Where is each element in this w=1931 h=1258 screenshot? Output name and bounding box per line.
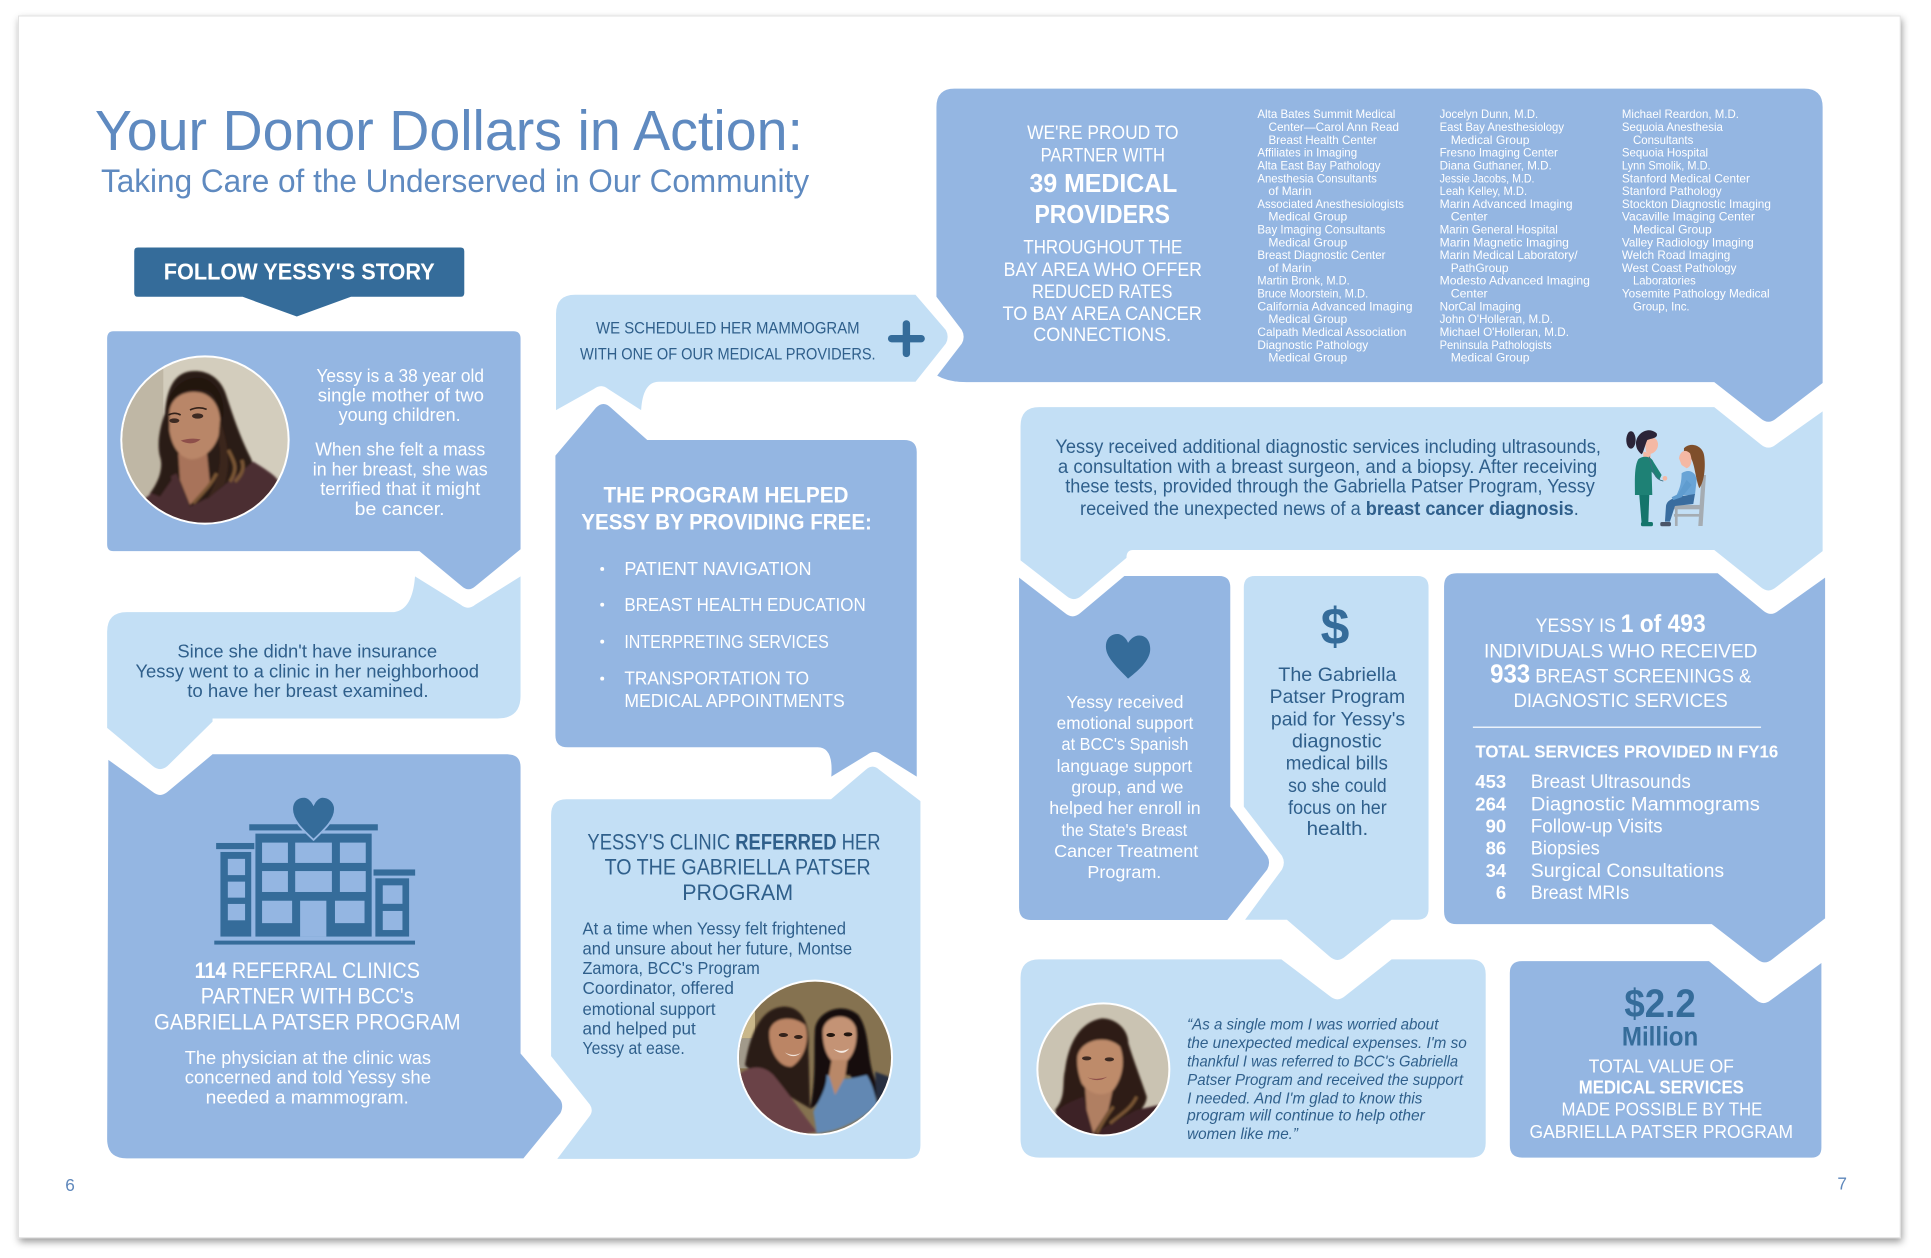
text: no insurance: Since she didn't have insurance <box>177 641 437 662</box>
text: emotional support: Zamora, BCC's Program <box>583 958 760 978</box>
table: service counts: Diagnostic Mammograms <box>1531 793 1760 815</box>
heading: program helped <box>581 482 872 535</box>
list: providers column 2: Marin Advanced Imaging <box>1440 197 1573 211</box>
panel: clinic referred <box>551 767 920 1159</box>
text: intro: young children. <box>339 404 461 425</box>
text: bills: diagnostic <box>1292 732 1382 753</box>
list: providers column 1: Affiliates in Imaging <box>1257 146 1357 160</box>
text: quote <box>1186 1017 1467 1143</box>
text: intro: When she felt a mass <box>315 439 485 460</box>
text: 1 of 493: 933 BREAST SCREENINGS & <box>1490 660 1751 688</box>
text: support group: at BCC's Spanish <box>1062 734 1188 754</box>
panel: medical providers <box>936 89 1823 422</box>
text: referral clinics: PARTNER WITH BCC's <box>201 984 414 1009</box>
text: bills: so she could <box>1288 776 1387 797</box>
page number 6: 6 <box>65 1175 75 1195</box>
text: emotional support: At a time when Yessy felt frightened <box>583 919 846 939</box>
table: service counts <box>1475 771 1760 904</box>
icon: heart <box>1106 634 1150 679</box>
subtitle: Taking Care of the Underserved in Our Community <box>101 163 809 199</box>
text: diagnosis: received the unexpected news of a breast cancer diagnosis. <box>1080 499 1579 520</box>
list: providers column 1: Alta Bates Summit Medical <box>1257 107 1395 121</box>
list: providers column 3: Stanford Medical Center <box>1622 171 1750 185</box>
table: service counts: Biopsies <box>1531 838 1600 860</box>
text: support group: Cancer Treatment <box>1054 841 1198 861</box>
list: free services: BREAST HEALTH EDUCATION <box>624 594 866 615</box>
photo: Yessy with Montse <box>737 980 895 1142</box>
icon: doctor and patient <box>1626 430 1706 526</box>
list: providers column 3: Vacaville Imaging Center <box>1622 210 1755 224</box>
banner: follow Yessy's story: FOLLOW YESSY'S STORY <box>164 259 435 285</box>
text: emotional support: Yessy at ease. <box>583 1038 685 1058</box>
text: referral clinics: GABRIELLA PATSER PROGRAM <box>154 1010 461 1035</box>
list: providers column 1: Calpath Medical Association <box>1257 325 1406 339</box>
list: providers column 1: Anesthesia Consultants <box>1257 171 1377 185</box>
text: emotional support: and unsure about her future, Montse <box>583 938 852 958</box>
list: providers column 2: Center <box>1451 287 1488 301</box>
text: bills: health. <box>1307 819 1368 840</box>
text: no insurance: to have her breast examined. <box>187 680 429 701</box>
list: free services: INTERPRETING SERVICES <box>624 631 829 652</box>
list: providers column 3: Medical Group <box>1633 223 1712 237</box>
list: free services: MEDICAL APPOINTMENTS <box>624 690 845 711</box>
panel: scheduled mammogram: WE SCHEDULED HER MAMMOGRAM <box>596 319 860 338</box>
table: service counts: 264 <box>1475 793 1507 814</box>
text: intro: be cancer. <box>355 498 445 519</box>
panel: emotional support <box>1019 576 1269 920</box>
list: providers column 2: Jocelyn Dunn, M.D. <box>1440 107 1538 121</box>
panel: referral clinics <box>107 754 562 1158</box>
text: emotional support: and helped put <box>583 1018 696 1038</box>
list: providers column 1: of Marin <box>1268 261 1312 275</box>
list: providers column 2: East Bay Anesthesiology <box>1440 120 1564 134</box>
list: providers column 1: Medical Group <box>1268 235 1348 249</box>
icon: plus <box>892 324 921 353</box>
heading: referred <box>587 830 881 905</box>
text: intro: terrified that it might <box>320 478 480 499</box>
list: providers column 1: Diagnostic Pathology <box>1257 338 1368 352</box>
text: quote: thankful I was referred to BCC's Gabriella <box>1187 1053 1458 1070</box>
list: providers column 2: NorCal Imaging <box>1440 299 1521 313</box>
text: total value: MEDICAL SERVICES <box>1579 1077 1744 1098</box>
text: bills: paid for Yessy's <box>1271 709 1405 730</box>
panel: additional diagnostics <box>1021 407 1823 599</box>
list: providers column 2: Diana Guthaner, M.D. <box>1440 158 1552 172</box>
table: service counts: Follow-up Visits <box>1531 816 1663 838</box>
list: free services: PATIENT NAVIGATION <box>624 558 812 579</box>
heading: program helped: THE PROGRAM HELPED <box>603 482 849 507</box>
table: service counts: 34 <box>1486 860 1507 881</box>
text: intro: in her breast, she was <box>313 458 488 479</box>
text: 1 of 493: YESSY IS 1 of 493 <box>1536 611 1706 638</box>
list: providers column 3: Welch Road Imaging <box>1622 248 1730 262</box>
text: bills: The Gabriella <box>1278 665 1397 686</box>
photo: Yessy smiling <box>1036 1002 1170 1138</box>
list: providers column 2: Marin General Hospital <box>1440 223 1558 237</box>
text: partner statement: CONNECTIONS. <box>1033 325 1171 346</box>
panel: quote <box>1021 959 1486 1158</box>
panel: medical bills paid <box>1244 576 1429 960</box>
text: emotional support <box>583 919 852 1058</box>
text: bills: Patser Program <box>1270 687 1405 708</box>
heading: referred: YESSY'S CLINIC REFERRED HER <box>587 830 881 855</box>
text: total value: MADE POSSIBLE BY THE <box>1562 1099 1762 1120</box>
text: support group: group, and we <box>1071 777 1184 797</box>
text: quote: the unexpected medical expenses. I'm so <box>1187 1035 1467 1052</box>
list: providers column 1: of Marin <box>1268 184 1312 198</box>
list: providers column 1 <box>1257 107 1413 365</box>
text: diagnosis: a consultation with a breast surgeon, and a biopsy. After receiving <box>1058 457 1597 478</box>
text: quote: program will continue to help other <box>1186 1108 1426 1125</box>
text: referral clinics: The physician at the clinic was <box>185 1047 431 1068</box>
icon: dollar sign: $ <box>1321 597 1350 655</box>
table: service counts: 6 <box>1496 882 1506 903</box>
list: providers column 1: Center—Carol Ann Read <box>1268 120 1399 134</box>
banner: follow Yessy's story <box>134 248 464 317</box>
panel: Yessy intro <box>107 331 521 589</box>
list: providers column 1: Martin Bronk, M.D. <box>1257 274 1350 288</box>
text: total value <box>1530 1056 1793 1142</box>
panel: clinic visit <box>107 576 521 769</box>
text: partner statement: WE'RE PROUD TO <box>1027 123 1179 144</box>
list: providers column 3: Group, Inc. <box>1633 299 1690 313</box>
text: support group: Program. <box>1087 862 1161 882</box>
list: providers column 3: Valley Radiology Imaging <box>1622 235 1754 249</box>
list: providers column 3: Yosemite Pathology Medical <box>1622 287 1770 301</box>
text: partner statement <box>1002 123 1202 346</box>
text: no insurance <box>135 641 479 701</box>
list: providers column 1: Medical Group <box>1268 312 1348 326</box>
list: providers column 1: Medical Group <box>1268 210 1348 224</box>
text: support group: Yessy received <box>1066 692 1183 712</box>
text: partner statement: BAY AREA WHO OFFER <box>1004 260 1202 281</box>
list: providers column 2: Leah Kelley, M.D. <box>1440 184 1527 198</box>
text: diagnosis: Yessy received additional diagnostic services including ultrasounds, <box>1055 437 1601 458</box>
text: partner statement: 39 MEDICAL <box>1030 170 1177 198</box>
list: providers column 1: Bay Imaging Consultants <box>1257 223 1386 237</box>
text: 1 of 493: INDIVIDUALS WHO RECEIVED <box>1484 641 1757 663</box>
table: service counts: 90 <box>1486 816 1506 837</box>
stat: $2.2 Million: $2.2 <box>1624 982 1696 1026</box>
text: quote: Patser Program and received the support <box>1187 1072 1464 1089</box>
text: diagnosis: these tests, provided through the Gabriella Patser Program, Yessy <box>1065 477 1595 498</box>
list: providers column 2: Peninsula Pathologists <box>1440 338 1552 352</box>
list: providers column 3: Stanford Pathology <box>1622 184 1722 198</box>
text: diagnosis <box>1055 437 1601 520</box>
list: providers column 2: Marin Medical Laboratory/ <box>1440 248 1578 262</box>
list: providers column 2: Medical Group <box>1451 351 1530 365</box>
list: providers column 3: Laboratories <box>1633 274 1696 288</box>
list: providers column 2: Michael O'Holleran, M.D. <box>1440 325 1569 339</box>
list: providers column 2: Fresno Imaging Center <box>1440 146 1558 160</box>
list: providers column 3: Sequoia Anesthesia <box>1622 120 1723 134</box>
list: providers column 1: Associated Anesthesiologists <box>1257 197 1404 211</box>
list: providers column 2: Center <box>1451 210 1488 224</box>
table: service counts: Breast Ultrasounds <box>1531 771 1691 793</box>
list: providers column 1: Alta East Bay Pathology <box>1257 158 1381 172</box>
text: bills: medical bills <box>1286 754 1388 775</box>
text: support group: the State's Breast <box>1062 820 1187 840</box>
panel: program helped <box>555 404 917 777</box>
text: partner statement: TO BAY AREA CANCER <box>1002 304 1202 325</box>
list: free services: TRANSPORTATION TO <box>624 668 809 689</box>
stat: $2.2 Million: Million <box>1622 1021 1698 1052</box>
text: quote: I needed. And I'm glad to know this <box>1187 1090 1422 1107</box>
text: referral clinics <box>154 958 461 1107</box>
page number 7: 7 <box>1837 1174 1847 1194</box>
text: intro: single mother of two <box>318 384 484 405</box>
text: support group: emotional support <box>1057 713 1193 733</box>
list: providers column 2: Modesto Advanced Imaging <box>1440 274 1590 288</box>
list: providers column 2: Jessie Jacobs, M.D. <box>1440 171 1534 185</box>
text: partner statement: PARTNER WITH <box>1041 145 1165 166</box>
list: providers column 2: Medical Group <box>1451 133 1530 147</box>
text: intro: Yessy is a 38 year old <box>316 365 484 386</box>
list: providers column 3: Consultants <box>1633 133 1693 147</box>
text: quote: women like me.” <box>1187 1126 1299 1143</box>
stat: $2.2 Million <box>1622 982 1698 1052</box>
list: providers column 1: Medical Group <box>1268 351 1348 365</box>
text: total value: GABRIELLA PATSER PROGRAM <box>1530 1121 1793 1142</box>
text: referral clinics: 114 REFERRAL CLINICS <box>195 958 420 983</box>
list: providers column 2 <box>1440 107 1590 365</box>
list: providers column 3: Stockton Diagnostic Imaging <box>1622 197 1771 211</box>
heading: referred: TO THE GABRIELLA PATSER <box>605 854 871 879</box>
text: 1 of 493: DIAGNOSTIC SERVICES <box>1514 690 1728 712</box>
table: service counts: 453 <box>1475 771 1506 792</box>
text: support group: language support <box>1057 756 1192 776</box>
text: referral clinics: concerned and told Yessy she <box>185 1067 431 1088</box>
panel: 2.2 million <box>1510 961 1821 1158</box>
list: providers column 3 <box>1622 107 1771 313</box>
list: providers column 2: John O'Holleran, M.D. <box>1440 312 1553 326</box>
text: total value: TOTAL VALUE OF <box>1589 1056 1734 1077</box>
list: providers column 1: California Advanced Imaging <box>1257 299 1413 313</box>
table: service counts: 86 <box>1486 838 1506 859</box>
list: free services <box>600 558 866 711</box>
list: providers column 1: Breast Diagnostic Center <box>1257 248 1386 262</box>
title: Your Donor Dollars in Action: <box>95 100 803 163</box>
list: providers column 2: PathGroup <box>1451 261 1509 275</box>
list: providers column 3: Michael Reardon, M.D. <box>1622 107 1739 121</box>
text: partner statement: REDUCED RATES <box>1032 282 1172 303</box>
text: bills <box>1270 665 1405 840</box>
list: providers column 1: Bruce Moorstein, M.D. <box>1257 287 1368 301</box>
list: providers column 2: Marin Magnetic Imaging <box>1440 235 1569 249</box>
heading: program helped: YESSY BY PROVIDING FREE: <box>581 510 872 535</box>
table: service counts: Breast MRIs <box>1531 882 1629 904</box>
panel: scheduled mammogram: WITH ONE OF OUR MEDICAL PROVIDERS. <box>580 345 876 364</box>
text: no insurance: Yessy went to a clinic in her neighborhood <box>135 660 479 681</box>
list: providers column 3: Lynn Smolik, M.D. <box>1622 158 1711 172</box>
list: providers column 1: Breast Health Center <box>1268 133 1377 147</box>
text: emotional support: Coordinator, offered <box>583 978 734 998</box>
text: partner statement: PROVIDERS <box>1034 201 1170 229</box>
heading: total services: TOTAL SERVICES PROVIDED IN FY16 <box>1475 741 1778 761</box>
text: support group: helped her enroll in <box>1049 798 1201 818</box>
text: intro <box>313 365 488 519</box>
heading: referred: PROGRAM <box>682 880 793 905</box>
icon: hospital building with heart <box>214 797 415 945</box>
list: providers column 3: Sequoia Hospital <box>1622 146 1708 160</box>
list: providers column 3: West Coast Pathology <box>1622 261 1737 275</box>
text: support group <box>1049 692 1201 882</box>
text: quote: “As a single mom I was worried about <box>1187 1017 1439 1034</box>
text: bills: focus on her <box>1288 798 1387 819</box>
table: service counts: Surgical Consultations <box>1531 860 1724 882</box>
text: referral clinics: needed a mammogram. <box>206 1086 409 1107</box>
text: 1 of 493 <box>1484 611 1757 712</box>
panel: total services <box>1444 573 1825 962</box>
photo: Yessy portrait <box>120 355 290 537</box>
text: partner statement: THROUGHOUT THE <box>1023 238 1182 259</box>
text: emotional support: emotional support <box>583 999 716 1019</box>
panel: scheduled mammogram <box>556 295 948 410</box>
